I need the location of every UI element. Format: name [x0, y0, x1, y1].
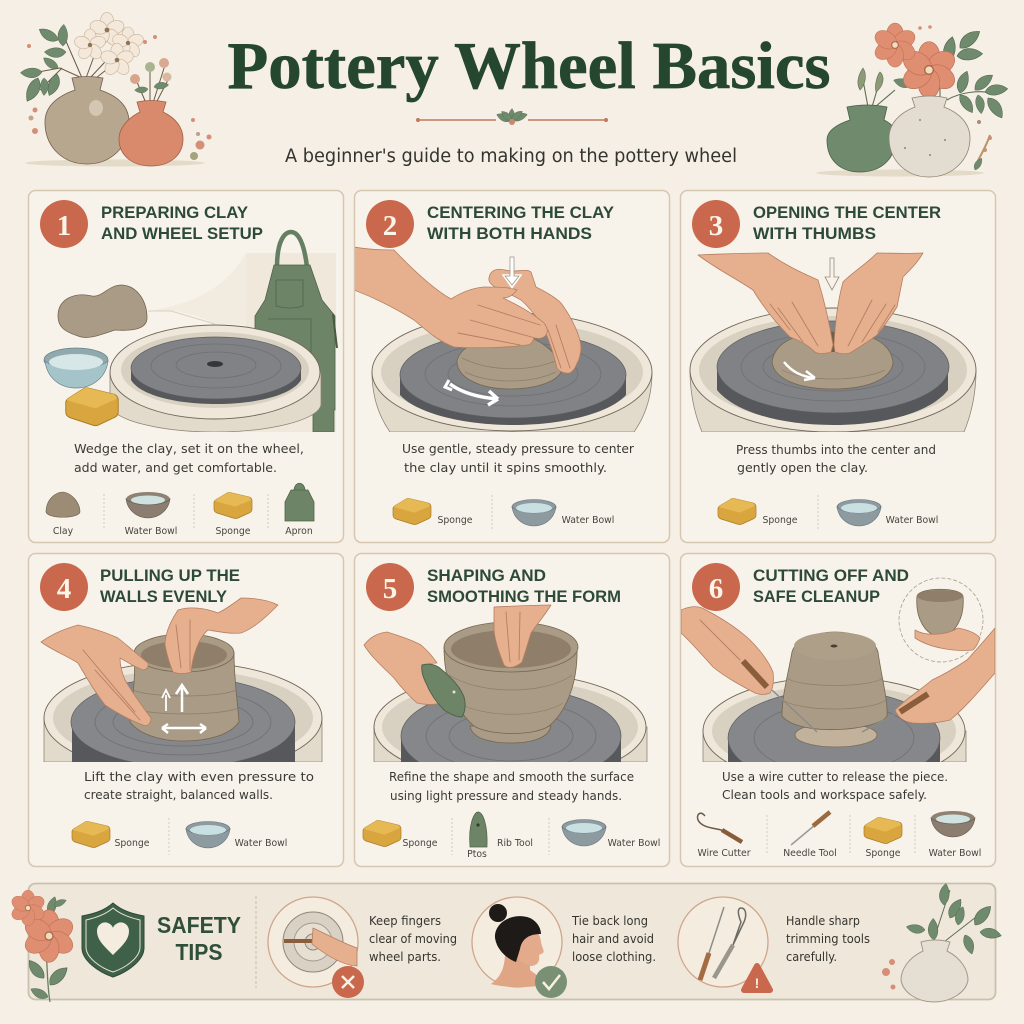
- instruction 4: create straight, balanced walls.: [84, 787, 273, 802]
- step number 3: 3: [709, 210, 723, 242]
- panel 2: centering: [354, 190, 670, 542]
- tip 2 text: hair and avoid: [572, 931, 654, 946]
- tip 2 text: loose clothing.: [572, 949, 656, 964]
- heading 6: CUTTING OFF AND: [753, 566, 909, 585]
- panel 1: preparing clay: [28, 190, 344, 542]
- tools 5: [363, 812, 660, 860]
- illustration: pulling walls: [41, 598, 322, 774]
- instruction 6: Clean tools and workspace safely.: [722, 787, 927, 802]
- water bowl: [44, 348, 108, 388]
- heading 3: WITH THUMBS: [753, 224, 876, 243]
- tools 1: [46, 483, 314, 537]
- tools 1: Sponge: [215, 526, 251, 537]
- tools 1: Water Bowl: [125, 526, 177, 537]
- safety tips heading: TIPS: [176, 939, 222, 965]
- heading 5: SHAPING AND: [427, 566, 546, 585]
- tools 6: [697, 811, 981, 859]
- decoration: top-left vases: [20, 12, 211, 167]
- instruction 5: using light pressure and steady hands.: [390, 788, 622, 803]
- panel 5: shaping: [354, 554, 670, 866]
- heading 2: WITH BOTH HANDS: [427, 224, 592, 243]
- tools 6: Needle Tool: [783, 848, 837, 859]
- heading 1: AND WHEEL SETUP: [101, 224, 263, 243]
- wheel basin: [110, 372, 321, 432]
- instruction 3: gently open the clay.: [737, 460, 868, 475]
- heading 4: PULLING UP THE: [100, 566, 240, 585]
- instruction 6: Use a wire cutter to release the piece.: [722, 769, 948, 784]
- instruction 4: Lift the clay with even pressure to: [84, 769, 314, 784]
- instruction 2: the clay until it spins smoothly.: [404, 460, 607, 475]
- tools 4: Sponge: [114, 838, 150, 849]
- decoration: flower left: [9, 890, 77, 1002]
- tools 5: Water Bowl: [608, 838, 660, 849]
- step number 1: 1: [57, 210, 71, 242]
- step number 3: [692, 200, 740, 248]
- tools 2: [393, 495, 614, 530]
- heading 4: WALLS EVENLY: [100, 587, 228, 606]
- tools 1: Apron: [285, 526, 313, 537]
- tools 6: Water Bowl: [929, 848, 981, 859]
- step number 1: [40, 200, 88, 248]
- clay lump: [58, 285, 147, 337]
- tip 3: handle tools: !: [755, 975, 759, 991]
- tip 2: tie back hair: [472, 897, 567, 998]
- step number 6: [692, 563, 740, 611]
- tip 3: handle tools: [678, 897, 770, 991]
- title ornament: [416, 108, 608, 125]
- heading 3: OPENING THE CENTER: [753, 203, 941, 222]
- tip 3 text: trimming tools: [786, 931, 870, 946]
- panel 6: cutting off: [680, 554, 996, 866]
- safety tips heading: SAFETY: [157, 912, 241, 938]
- illustration: opening the center: [690, 253, 976, 432]
- tools 2: Sponge: [437, 515, 473, 526]
- instruction 2: Use gentle, steady pressure to center: [402, 441, 635, 456]
- heading 5: SMOOTHING THE FORM: [427, 587, 621, 606]
- illustration: cutting off: [681, 578, 995, 762]
- panel 4: pulling walls: [28, 554, 344, 866]
- panel: safety tips: [9, 883, 1002, 1002]
- tip 3 text: carefully.: [786, 949, 837, 964]
- tip 1 text: Keep fingers: [369, 913, 441, 928]
- step number 4: 4: [57, 573, 71, 605]
- heading 1: PREPARING CLAY: [101, 203, 249, 222]
- instruction 1: add water, and get comfortable.: [74, 460, 277, 475]
- tip 1 text: wheel parts.: [369, 949, 441, 964]
- tools 6: Sponge: [865, 848, 901, 859]
- apron: [255, 232, 337, 432]
- step number 5: [366, 563, 414, 611]
- tools 4: Water Bowl: [235, 838, 287, 849]
- heading 6: SAFE CLEANUP: [753, 587, 880, 606]
- tip 1: keep fingers clear: [268, 897, 364, 998]
- tip 1 text: clear of moving: [369, 931, 457, 946]
- step number 5: 5: [383, 573, 397, 605]
- tools 3: [718, 495, 938, 530]
- subtitle: A beginner's guide to making on the pottery wheel: [285, 146, 737, 167]
- tip 2 text: Tie back long: [571, 913, 648, 928]
- tools 3: Sponge: [762, 515, 798, 526]
- illustration: wheel setup: [44, 232, 337, 432]
- decoration: top-right vases: [816, 23, 1008, 177]
- tools 1: Clay: [53, 526, 74, 537]
- tools 4: [72, 818, 287, 855]
- tools 5: Ptos: [467, 849, 487, 860]
- title: Pottery Wheel Basics: [228, 29, 830, 103]
- tools 5: Rib Tool: [497, 838, 533, 849]
- tools 6: Wire Cutter: [697, 848, 751, 859]
- tip 3 text: Handle sharp: [786, 913, 860, 928]
- tools 2: Water Bowl: [562, 515, 614, 526]
- heading 2: CENTERING THE CLAY: [427, 203, 615, 222]
- illustration: shaping the form: [364, 604, 648, 762]
- step number 2: [366, 200, 414, 248]
- step number 4: [40, 563, 88, 611]
- tools 5: Sponge: [402, 838, 438, 849]
- instruction 5: Refine the shape and smooth the surface: [389, 769, 634, 784]
- instruction 1: Wedge the clay, set it on the wheel,: [74, 441, 304, 456]
- step number 6: 6: [709, 573, 723, 605]
- panel 3: opening: [680, 190, 996, 542]
- decoration: vase right: [882, 883, 1002, 1002]
- step number 2: 2: [383, 210, 397, 242]
- instruction 3: Press thumbs into the center and: [736, 442, 936, 457]
- illustration: centering clay: [354, 247, 652, 432]
- tools 3: Water Bowl: [886, 515, 938, 526]
- icon: shield with heart: [82, 903, 144, 977]
